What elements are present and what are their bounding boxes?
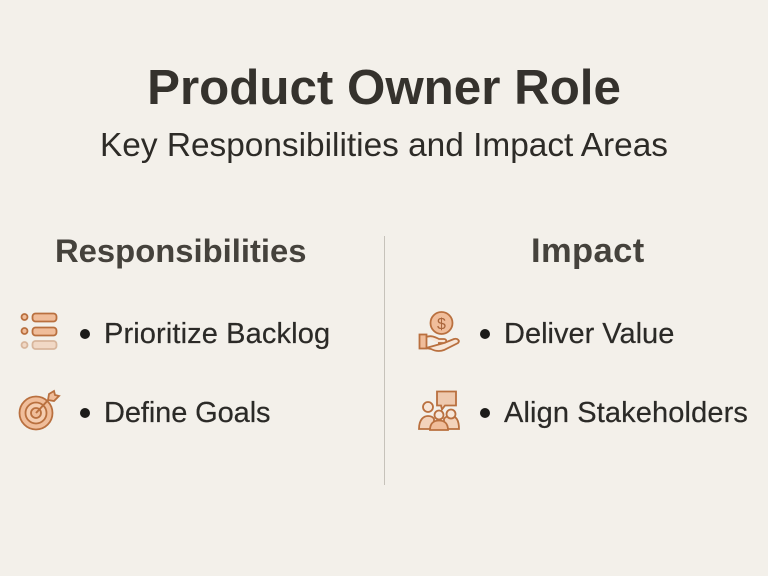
icon: hand holding coin bbox=[418, 311, 460, 352]
icon: stakeholders with speech bubble bbox=[418, 390, 460, 431]
heading: impact: Impact bbox=[531, 232, 645, 270]
icon: hand holding coin: $ bbox=[437, 316, 446, 333]
bullet: define goals bbox=[80, 408, 90, 418]
bullet: align stakeholders bbox=[480, 408, 490, 418]
bullet: deliver value bbox=[480, 329, 490, 339]
icon: target with arrow bbox=[18, 390, 61, 430]
bullet: prioritize backlog bbox=[80, 329, 90, 339]
text: deliver value: Deliver Value bbox=[504, 318, 674, 350]
text: prioritize backlog: Prioritize Backlog bbox=[104, 318, 330, 350]
icon: prioritized list bbox=[20, 312, 58, 350]
title: Product Owner Role bbox=[147, 60, 621, 115]
text: define goals: Define Goals bbox=[104, 397, 270, 429]
divider between columns bbox=[384, 236, 385, 485]
subtitle: Key Responsibilities and Impact Areas bbox=[100, 127, 668, 164]
heading: responsibilities: Responsibilities bbox=[55, 232, 307, 269]
text: align stakeholders: Align Stakeholders bbox=[504, 397, 748, 429]
